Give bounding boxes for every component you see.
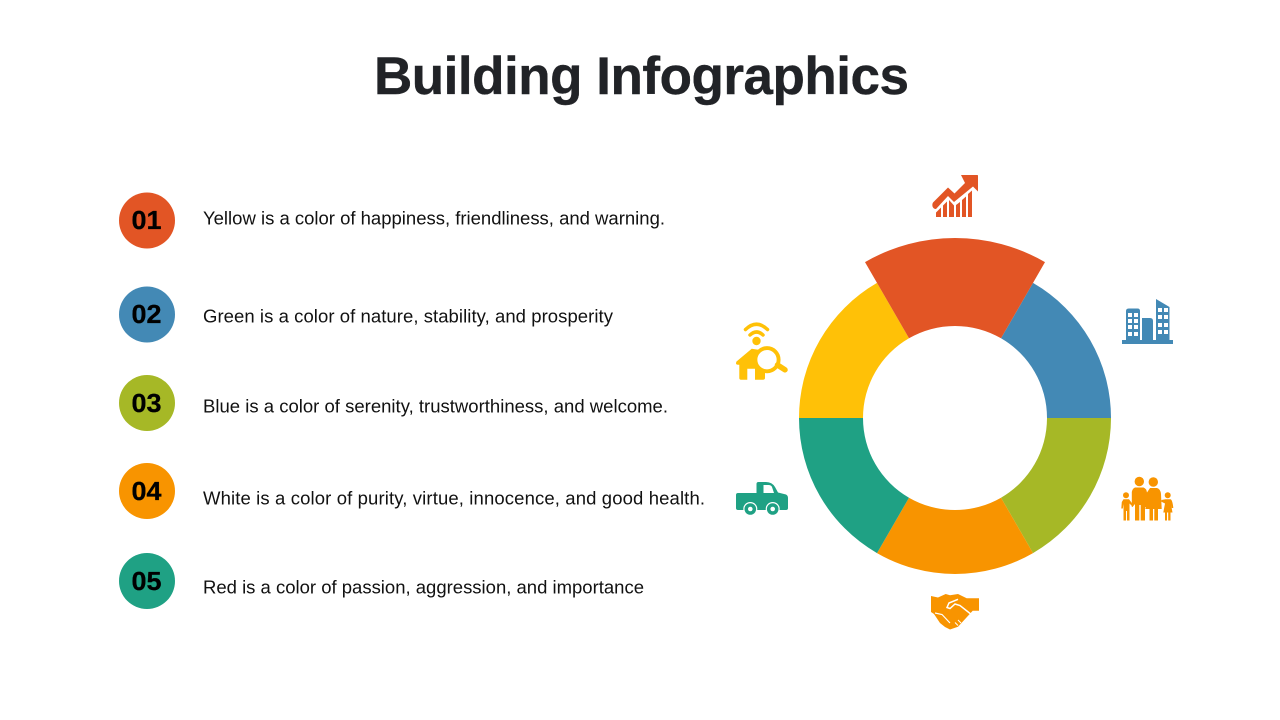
donut chart: [799, 238, 1111, 574]
segment: yellow: [799, 283, 909, 418]
list item 05: [119, 553, 644, 609]
text 01: Yellow is a color of happiness, friendliness, and warning.: [203, 208, 665, 228]
list item 03: [119, 375, 668, 431]
segment: green: [1001, 418, 1111, 553]
number badge 05: [119, 553, 175, 609]
segment: teal: [799, 418, 909, 553]
number badge 01: [119, 192, 175, 248]
number badge 04: 04: [132, 476, 162, 506]
icon: rising chart arrow: [932, 175, 978, 217]
number badge 04: [119, 463, 175, 519]
number badge 02: 02: [132, 299, 162, 329]
number badge 03: [119, 375, 175, 431]
icon: handshake: [931, 594, 979, 630]
text 05: Red is a color of passion, aggression, and importance: [203, 576, 644, 598]
list item 01: [119, 192, 665, 248]
list item 02: [119, 286, 614, 342]
number badge 05: 05: [132, 566, 162, 596]
title: Building Infographics: [374, 47, 909, 106]
icon: family: [1121, 477, 1173, 520]
number badge 02: [119, 286, 175, 342]
icon: city buildings: [1122, 299, 1173, 344]
segment: red, enlarged: [865, 238, 1045, 338]
number badge 03: 03: [132, 388, 162, 418]
text 04: White is a color of purity, virtue, innocence, and good health.: [203, 488, 705, 508]
list item 04: [119, 463, 705, 519]
text 02: Green is a color of nature, stability, and prosperity: [203, 306, 614, 326]
icon: delivery truck: [736, 482, 788, 516]
text 03: Blue is a color of serenity, trustworthiness, and welcome.: [203, 396, 668, 416]
segment: blue: [1001, 283, 1111, 418]
number badge 01: 01: [132, 205, 162, 235]
segment: orange: [877, 498, 1033, 574]
icon: smart home search: [736, 324, 785, 380]
